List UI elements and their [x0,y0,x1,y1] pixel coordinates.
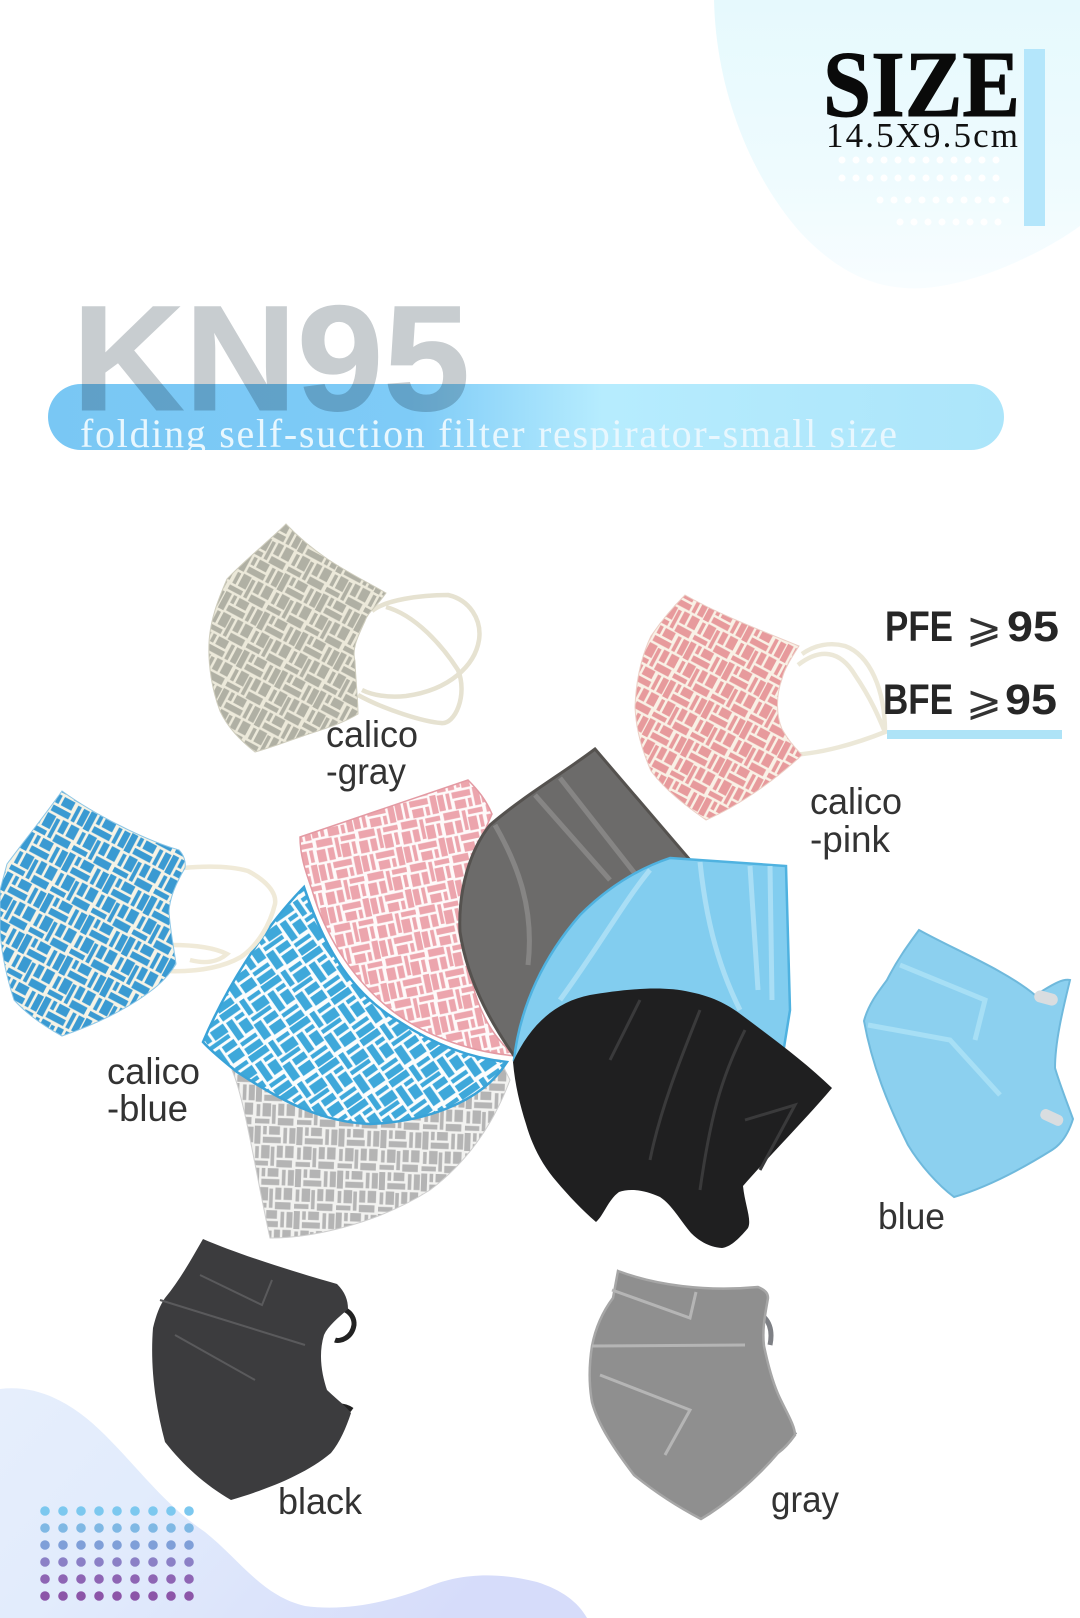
mask: light blue, folded [514,858,790,1060]
spec: BFE: 95 [1005,676,1057,724]
mask: gray, flat [590,1271,795,1519]
mask body [152,1239,351,1500]
label: calico blue [107,1051,200,1129]
ear loops [325,1308,354,1410]
seam lines [495,778,640,965]
label: calico pink: -pink [810,819,890,860]
title band [48,384,1004,450]
KN95 title: KN95 [72,274,470,442]
seam lines [610,1000,795,1190]
seam lines [592,1290,745,1455]
mask: calico pink [635,595,885,820]
mask body [864,930,1073,1197]
seam lines [868,965,1000,1095]
mask body [0,791,185,1036]
faint white dots below size [842,160,1010,222]
mask: black, folded [513,989,832,1248]
mask body [514,858,790,1060]
label: calico gray: calico [326,714,418,755]
spec: PFE: PFE [885,603,953,651]
mask: dark gray, folded [460,749,690,1064]
size value: 14.5X9.5cm [826,116,1018,155]
mask: black, flat [152,1239,354,1500]
label: calico pink [810,781,902,860]
size heading: SIZE [823,33,1020,137]
mask body [635,595,802,820]
spec: BFE: ⩾ [966,676,1002,725]
seam lines [160,1275,305,1380]
spec: BFE: BFE [883,676,953,724]
label: black: black [278,1481,362,1522]
ear loops [165,867,275,971]
mask: blue, flat [864,930,1073,1197]
mask: calico blue, folded [203,887,507,1124]
label: calico blue: -blue [107,1088,188,1129]
mask: calico gray, folded [232,1040,510,1238]
size accent bar [1024,49,1045,226]
spec: PFE [885,603,1059,652]
seam lines [560,862,772,1010]
mask body [209,524,386,752]
mask body [460,749,690,1064]
spec: BFE [883,676,1057,725]
label: blue: blue [878,1196,945,1237]
label: calico gray: -gray [326,751,406,792]
subtitle: folding self-suction filter respirator-small size [80,411,897,456]
mask body [513,989,832,1248]
spec: PFE: ⩾ [966,603,1002,652]
ear tabs [1033,989,1065,1128]
mask: calico blue, flat [0,791,275,1036]
ear loops [358,595,479,723]
ear loops [785,644,885,755]
label: calico blue: calico [107,1051,200,1092]
mask: calico gray [209,524,479,752]
label: calico gray [326,714,418,792]
mask: calico pink, folded [300,780,516,1056]
background shape: bottom-left lavender wave [0,1388,587,1618]
label: gray: gray [771,1479,839,1520]
spec underline [887,730,1062,739]
mask body [590,1271,795,1519]
spec: PFE: 95 [1007,603,1059,651]
label: calico pink: calico [810,781,902,822]
background shape: top-right pale blue blob [714,0,1080,288]
ear loops [745,1310,795,1435]
dot grid decoration [45,1511,190,1596]
